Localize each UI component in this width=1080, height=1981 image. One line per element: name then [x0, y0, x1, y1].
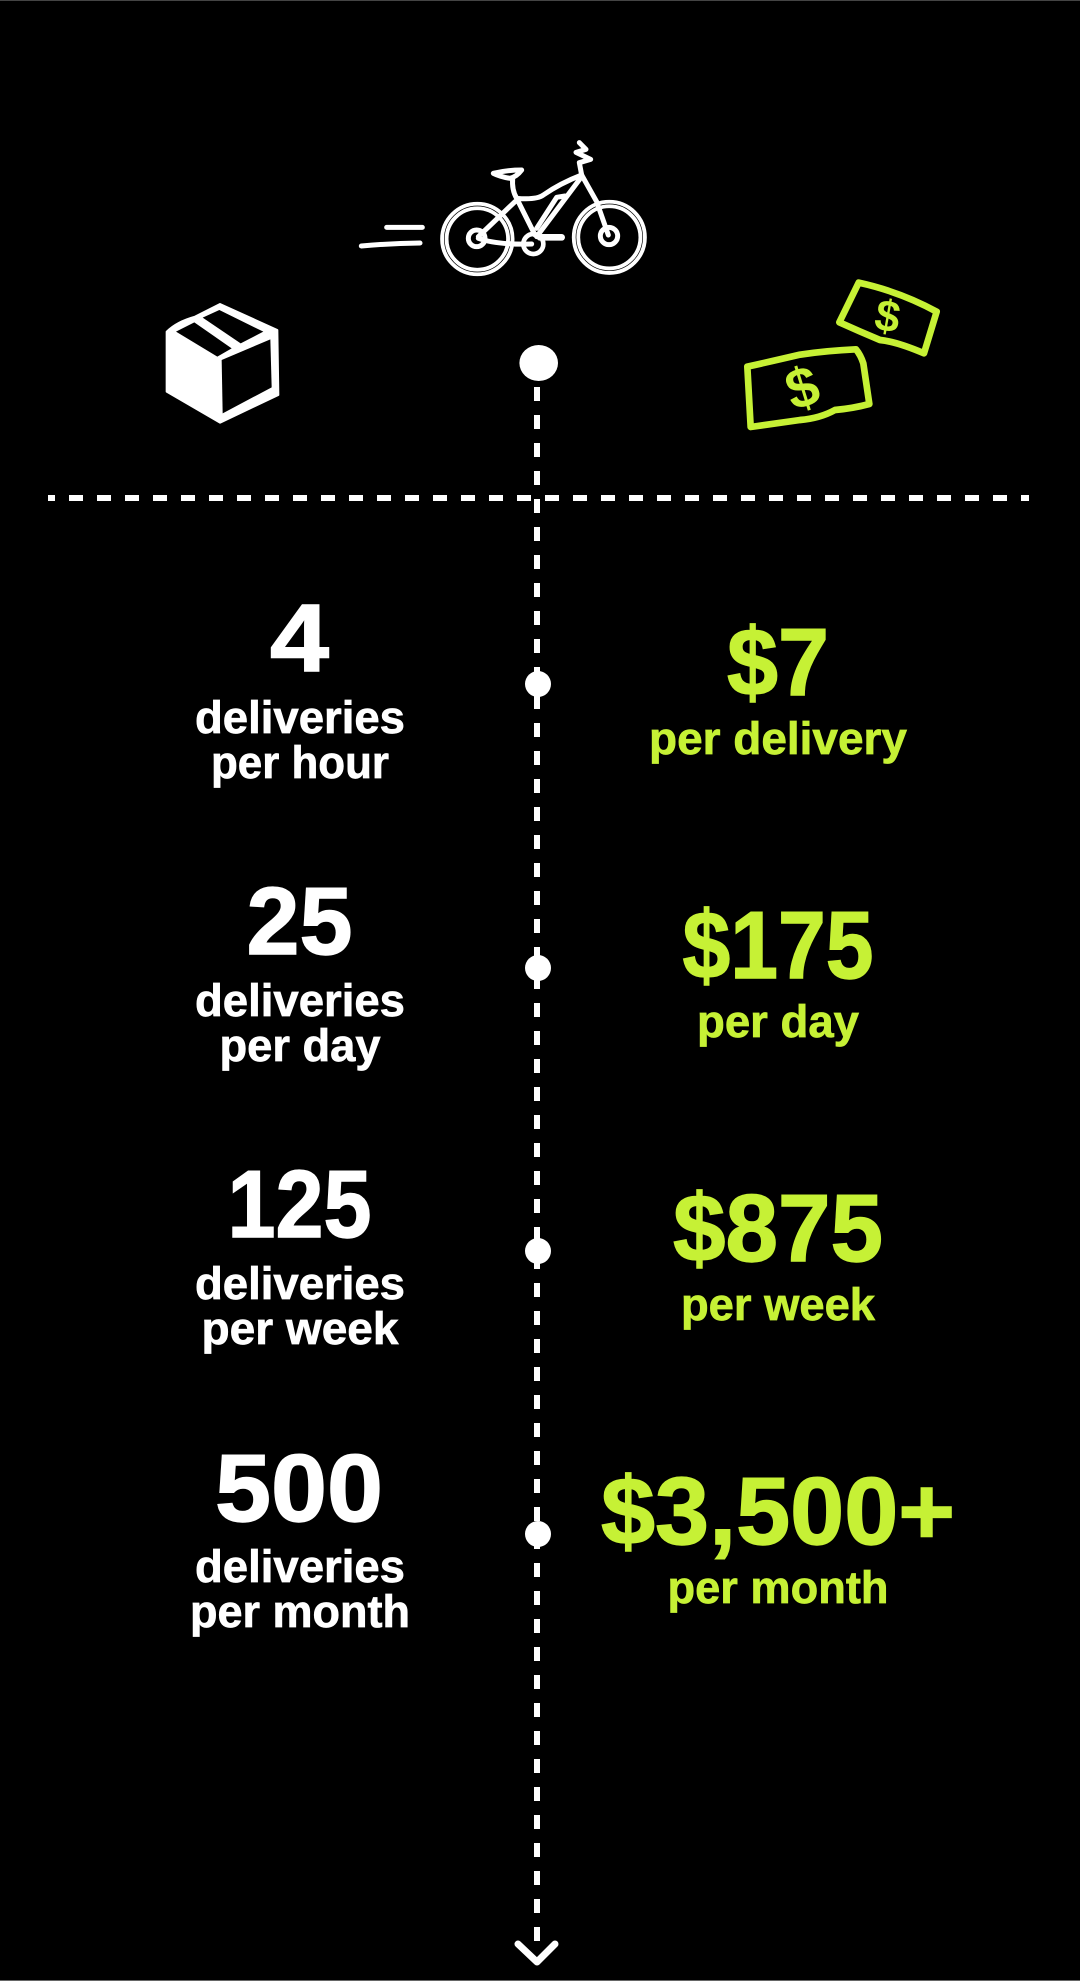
row 1: deliveries per hour: per hour [211, 737, 389, 788]
icon: dollar bills: $ [778, 354, 827, 423]
icon: dollar bills: $ [871, 290, 904, 343]
row 3: earnings per week: $875 [673, 1175, 883, 1282]
row 4: earnings per month: per month [668, 1562, 888, 1613]
row 4: deliveries per month [190, 1435, 410, 1637]
icon: dollar bills [747, 283, 937, 427]
divider: horizontal dashed line [48, 495, 1029, 501]
row 4: deliveries per month: 500 [215, 1435, 383, 1542]
row 3: deliveries per week: per week [202, 1303, 399, 1354]
row 3: deliveries per week: 125 [228, 1151, 372, 1258]
row 1: earnings per delivery [649, 609, 907, 764]
row 1: earnings per delivery: $7 [727, 609, 829, 716]
row 3: earnings per week: per week [681, 1279, 876, 1330]
row 2: earnings per day [682, 892, 874, 1047]
row 4: deliveries per month: per month [190, 1586, 410, 1637]
row 3: earnings per week [673, 1175, 883, 1330]
row 3 marker [525, 1238, 551, 1264]
row 4 marker [525, 1521, 551, 1547]
row 1: deliveries per hour: deliveries [195, 692, 405, 743]
row 2: deliveries per day: 25 [246, 868, 352, 975]
row 1 marker [525, 671, 551, 697]
row 1: deliveries per hour: 4 [270, 585, 329, 692]
timeline start dot [519, 345, 558, 381]
row 1: earnings per delivery: per delivery [649, 713, 907, 764]
row 3: deliveries per week: deliveries [195, 1258, 405, 1309]
row 2: deliveries per day: deliveries [195, 975, 405, 1026]
timeline: vertical dashed line [534, 387, 540, 1943]
row 4: earnings per month: $3,500+ [601, 1458, 955, 1565]
icon: package box [167, 304, 278, 423]
row 2: earnings per day: $175 [682, 892, 874, 999]
row 2 marker [525, 955, 551, 981]
row 2: deliveries per day [195, 868, 405, 1071]
row 2: deliveries per day: per day [220, 1020, 380, 1071]
timeline arrowhead [518, 1944, 555, 1962]
icon: bicycle with speed lines [361, 143, 643, 272]
row 1: deliveries per hour [195, 585, 405, 788]
row 3: deliveries per week [195, 1151, 405, 1354]
row 2: earnings per day: per day [697, 996, 859, 1047]
row 4: earnings per month [601, 1458, 955, 1613]
row 4: deliveries per month: deliveries [195, 1541, 405, 1592]
